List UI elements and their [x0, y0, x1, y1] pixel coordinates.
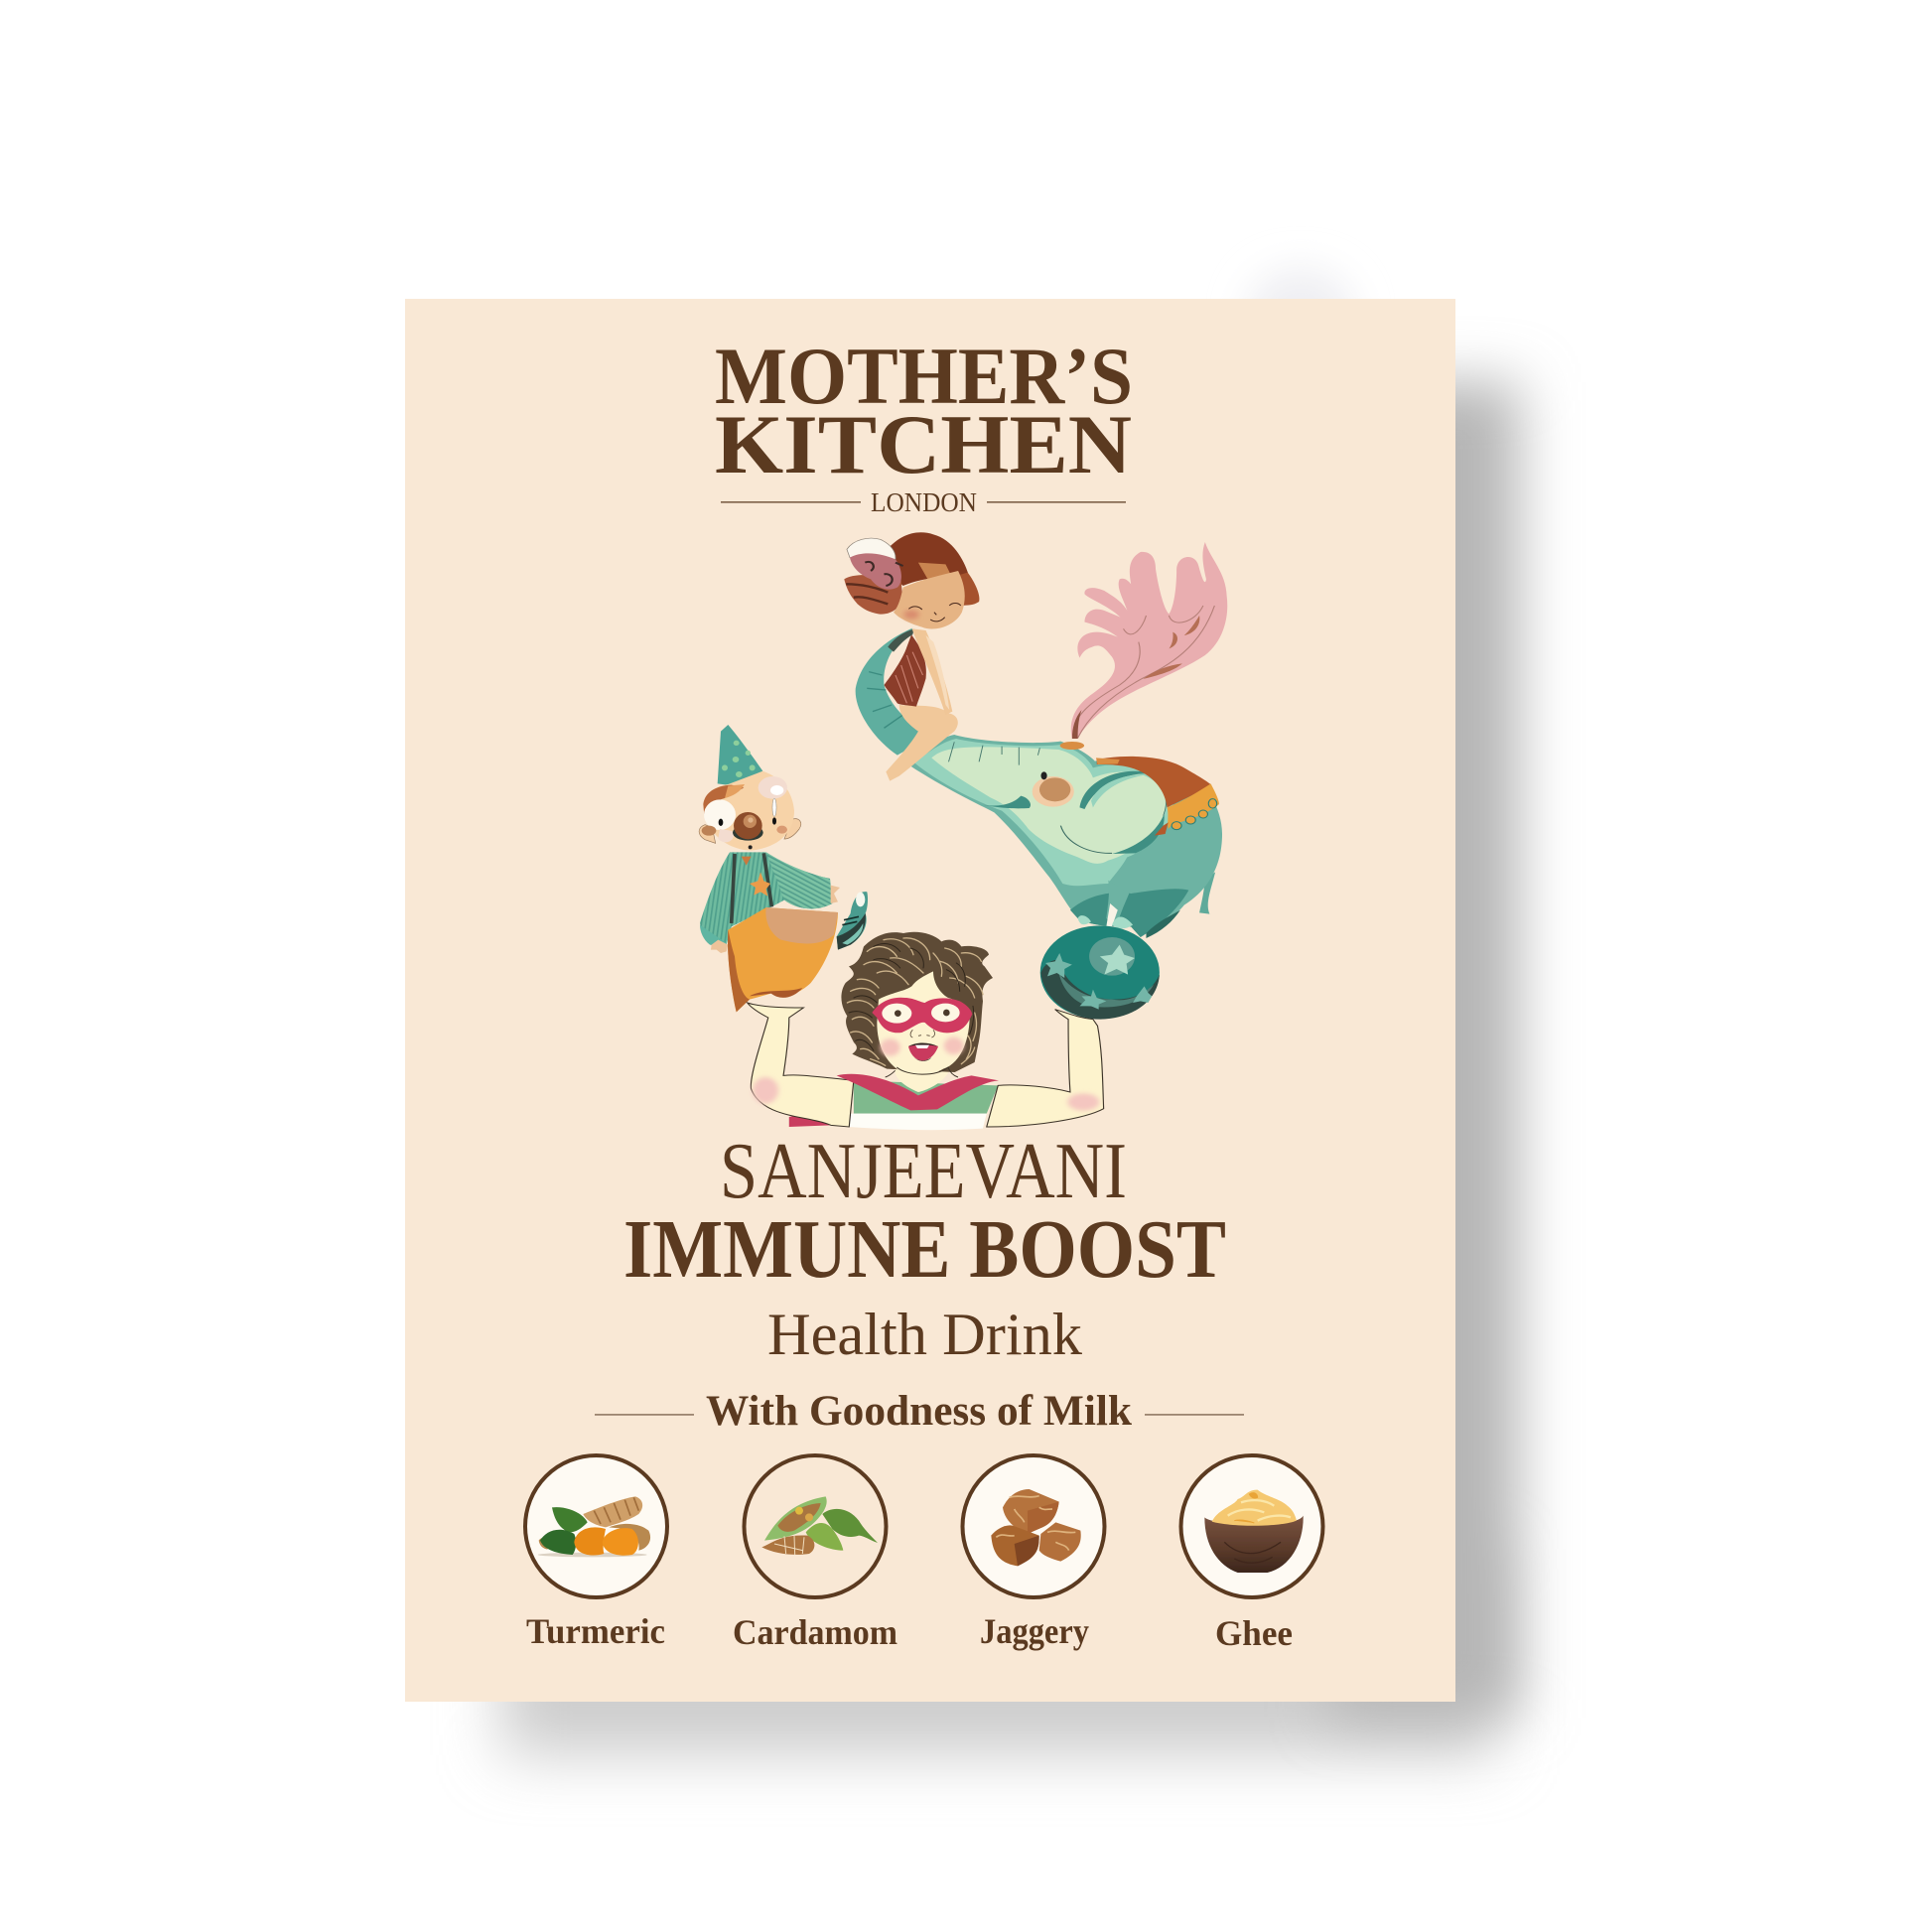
ingredient: cardamom circle: [745, 1455, 886, 1597]
logo: Mother's Kitchen London: [715, 331, 1133, 517]
illustration: girl on trunk: [844, 532, 979, 781]
ingredient: ghee: [1181, 1455, 1322, 1597]
product title: SANJEEVANI: [720, 1128, 1127, 1215]
illustration: circus characters: [699, 532, 1227, 1130]
ingredient labels: Turmeric: [526, 1611, 665, 1651]
drop shadow: [501, 268, 1519, 1755]
illustration: elephant: [856, 628, 1222, 938]
illustration: cardamom placed in shared crop space: [761, 1496, 878, 1555]
logo: Mother's Kitchen London: KITCHEN: [715, 398, 1132, 491]
product title: [623, 1128, 1226, 1367]
subheading: with goodness of milk: With Goodness of Milk: [706, 1388, 1132, 1435]
ingredient: jaggery: [963, 1455, 1104, 1597]
logo: Mother's Kitchen London: MOTHER’S: [715, 331, 1133, 421]
illustration: child head with mask: [841, 932, 993, 1077]
ingredient: turmeric: [525, 1455, 878, 1597]
ingredient labels: [526, 1611, 1293, 1653]
illustration: star ball: [1040, 925, 1160, 1020]
illustration: pink elephant plume: [1071, 542, 1227, 739]
logo: Mother's Kitchen London: LONDON: [871, 487, 977, 517]
panel: product card: [405, 299, 1455, 1702]
illustration: child body and arms: [748, 925, 1160, 1130]
ingredient labels: Jaggery: [980, 1611, 1089, 1651]
product title: IMMUNE BOOST: [623, 1203, 1226, 1296]
ingredient labels: Cardamom: [733, 1612, 897, 1652]
illustration: clown: [699, 725, 868, 1012]
product title: Health Drink: [767, 1302, 1082, 1367]
ingredient labels: Ghee: [1215, 1613, 1293, 1653]
